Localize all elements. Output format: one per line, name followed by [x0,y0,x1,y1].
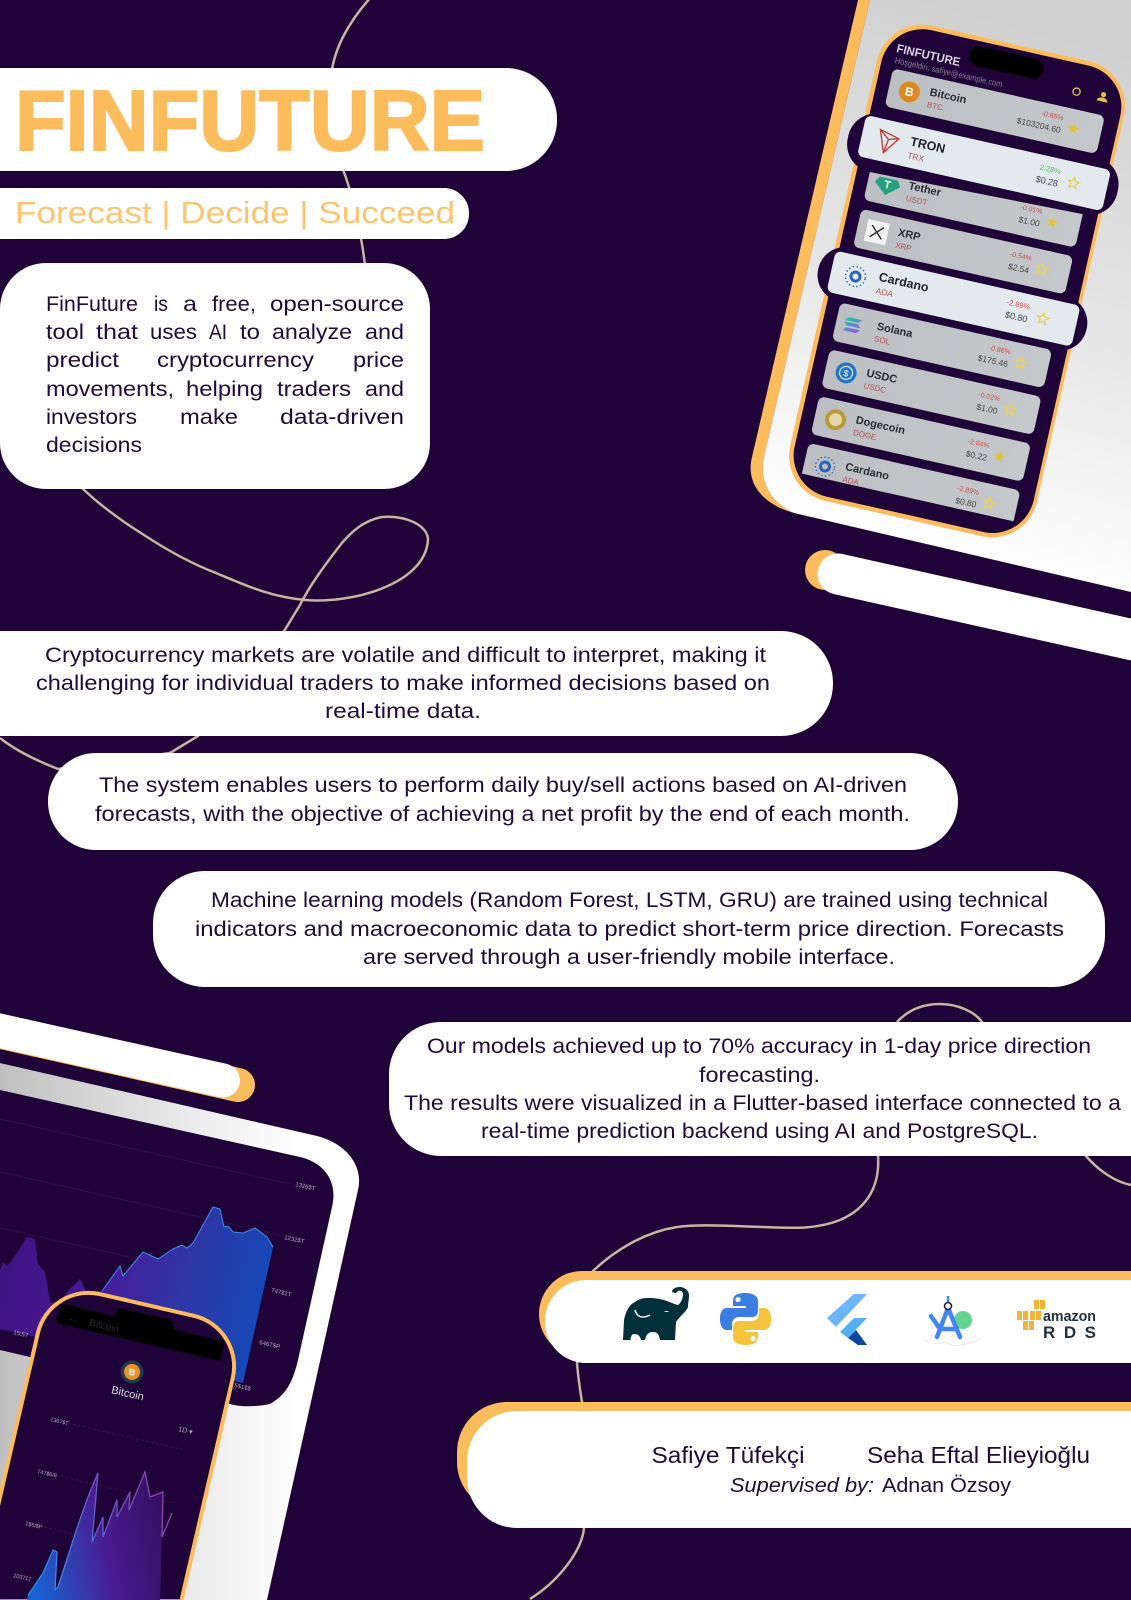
highlighted card: Cardano: ADA [875,286,894,299]
intro text: free, [212,293,256,316]
intro text: uses [150,321,197,344]
intro text: a [183,293,197,316]
phone header: Hoşgeldin, safiye@example.com [894,55,1003,89]
intro text: traders [277,378,351,401]
card: Dogecoin: -2.84% [967,438,990,450]
card: Solana: $175.46 [977,353,1009,369]
card: Dogecoin: Dogecoin [855,414,906,437]
panel: method [153,871,1105,987]
panel: objective [48,753,958,850]
intro text: cryptocurrency [157,349,315,372]
tablet chart area [0,1207,273,1383]
icon: amazon rds: amazon [1043,1308,1096,1325]
title pill [0,68,557,171]
phone mockup: Bitcoin detail [0,1283,244,1600]
highlighted card: TRON: TRX [906,150,925,164]
intro text: open-source [270,293,404,316]
panel: results [389,1022,1131,1156]
card: Solana [832,302,1052,388]
card: XRP: XRP [897,227,922,244]
intro text: make [180,406,238,429]
icon: bitcoin: B [128,1367,137,1378]
card: XRP: XRP [894,241,912,253]
phone mockup: coin list [789,24,1125,538]
method text: Machine learning models (Random Forest, LSTM, GRU) are trained using technical [211,889,1048,912]
card: Bitcoin: -0.66% [1041,111,1064,122]
icon: gradle elephant [623,1287,689,1340]
card: Cardano lower [802,444,1020,522]
card: USDC: $1.00 [976,402,999,416]
card: Bitcoin: B [904,84,915,100]
tablet mockup: price chart [0,1063,359,1600]
objective text [95,774,910,826]
card: Tether: Tether [907,180,943,199]
authors text: Seha Eftal Elieyioğlu [867,1442,1090,1468]
intro text: to [240,321,260,344]
decorative bar top right [805,550,1131,650]
objective text: The system enables users to perform daily buy/sell actions based on AI-driven [99,774,907,797]
method text: indicators and macroeconomic data to predict short-term price direction. Forecasts [195,918,1064,941]
highlighted card: TRON: $0.28 [1035,174,1059,189]
tablet axis labels: 1232$T [284,1235,305,1246]
card: Dogecoin: DOGE [852,428,877,442]
authors text: Safiye Tüfekçi [652,1442,804,1468]
title: FINFUTURE [15,74,485,169]
problem text [36,644,770,723]
card: Cardano lower: -2.89% [956,485,980,497]
intro text: AI [209,321,227,344]
phone top bar [57,1295,227,1361]
tagline: Forecast | Decide | Succeed [15,195,455,230]
icon: flutter [827,1294,867,1345]
tablet axis labels: 646T$P [259,1340,280,1351]
card: Tether: USDT [905,194,928,207]
card: USDC: USDC [865,368,898,386]
tablet axis labels: 15:57 [13,1330,29,1339]
tagline pill [0,188,469,239]
results text [404,1035,1121,1143]
objective text: forecasts, with the objective of achieving a net profit by the end of each month. [95,803,910,826]
highlighted card: Cardano: -2.89% [1006,298,1031,312]
results text: forecasting. [699,1064,820,1087]
phone header: FINFUTURE [895,41,962,69]
card: Bitcoin: BTC [926,100,944,113]
intro text: FinFuture [46,293,138,316]
intro text: price [353,349,404,372]
results text: The results were visualized in a Flutter-based interface connected to a [404,1092,1121,1115]
authors text [652,1442,1090,1497]
intro text: analyze [272,321,352,344]
phone chart labels: 1367$T [50,1417,70,1427]
results text: Our models achieved up to 70% accuracy in 1-day price direction [427,1035,1091,1058]
card: XRP [853,209,1073,295]
method text: are served through a user-friendly mobile interface. [363,946,895,969]
icon: amazon rds [1017,1300,1096,1342]
card: Bitcoin: $103204.60 [1016,115,1062,135]
panel: technology logos [539,1271,1131,1363]
intro text: decisions [46,434,142,457]
card: XRP: -0.54% [1009,251,1032,263]
card: Cardano lower: Cardano [844,461,890,483]
card: Bitcoin: Bitcoin [928,87,968,107]
card: XRP: $2.54 [1007,261,1030,276]
phone chart labels: 1D ▾ [178,1426,194,1436]
panel: problem [0,631,833,736]
card: Solana: -0.86% [988,345,1011,356]
card: Tether: $1.00 [1018,214,1041,229]
highlighted card: Cardano: Cardano [877,270,930,295]
intro text: movements, [46,378,174,401]
card: USDC: -0.02% [978,392,1001,403]
phone chart labels: 1$5/$P [25,1521,43,1531]
problem text: challenging for individual traders to make informed decisions based on [36,672,770,695]
card: Cardano lower: $0.80 [954,495,978,510]
phone chart labels: 747$6/8 [37,1469,57,1479]
phone top bar: ← [67,1313,79,1326]
phone chart labels [13,1417,194,1583]
highlighted card: TRON: 2.28% [1039,163,1062,176]
icon: bitcoin [118,1358,146,1386]
card: Dogecoin [811,396,1031,482]
phone top bar: Bitcoin [88,1318,120,1335]
panel: authors [457,1402,1131,1528]
authors text: Supervised by: [730,1474,874,1497]
panel: intro [0,263,430,489]
intro text: helping [186,378,263,401]
icon: python [720,1293,771,1345]
card: Tether [864,172,1083,246]
authors text: Adnan Özsoy [882,1474,1012,1497]
panel: white device frame top right [751,0,1131,592]
tablet axis labels: 5$1$$ [234,1383,252,1393]
icon: android studio [925,1296,982,1346]
card: USDC [821,349,1042,435]
decorative bar bottom left [0,1024,238,1085]
highlighted card: TRON: TRON [909,135,947,156]
tablet axis labels [13,1182,316,1393]
phone header [893,29,1113,112]
phone chart area [27,1472,163,1600]
card: Tether: -0.01% [1020,204,1043,216]
card: Tether: T [883,179,892,192]
method text [195,889,1064,969]
intro text [46,293,404,457]
highlighted card: Cardano: $0.80 [1004,310,1028,324]
tablet axis labels: 747$1T [271,1288,292,1299]
highlighted card: TRON [841,102,1125,227]
card: Solana: Solana [876,321,914,341]
card: Solana: SOL [873,334,891,347]
card: Dogecoin: $0.22 [965,448,988,463]
intro text: and [365,378,404,401]
card: USDC: USDC [863,381,887,395]
intro text: tool [46,321,84,344]
intro text: investors [46,406,137,429]
phone mockup: Bitcoin detail: Bitcoin [110,1384,145,1403]
intro text: predict [46,349,119,372]
phone chart labels: 103717 [13,1573,32,1583]
intro text: data-driven [280,406,404,429]
intro text: and [365,321,404,344]
card: Cardano lower: ADA [842,475,860,487]
results text: real-time prediction backend using AI and PostgreSQL. [481,1120,1038,1143]
tablet axis labels: 1326$T [295,1182,316,1193]
problem text: real-time data. [325,700,481,723]
card: USDC: $ [842,368,850,379]
problem text: Cryptocurrency markets are volatile and difficult to interpret, making it [45,644,766,667]
intro text: is [154,293,168,316]
intro text: that [96,321,138,344]
icon: amazon rds: R D S [1043,1323,1096,1342]
card: Bitcoin [885,68,1105,154]
highlighted card: Cardano [812,242,1093,356]
